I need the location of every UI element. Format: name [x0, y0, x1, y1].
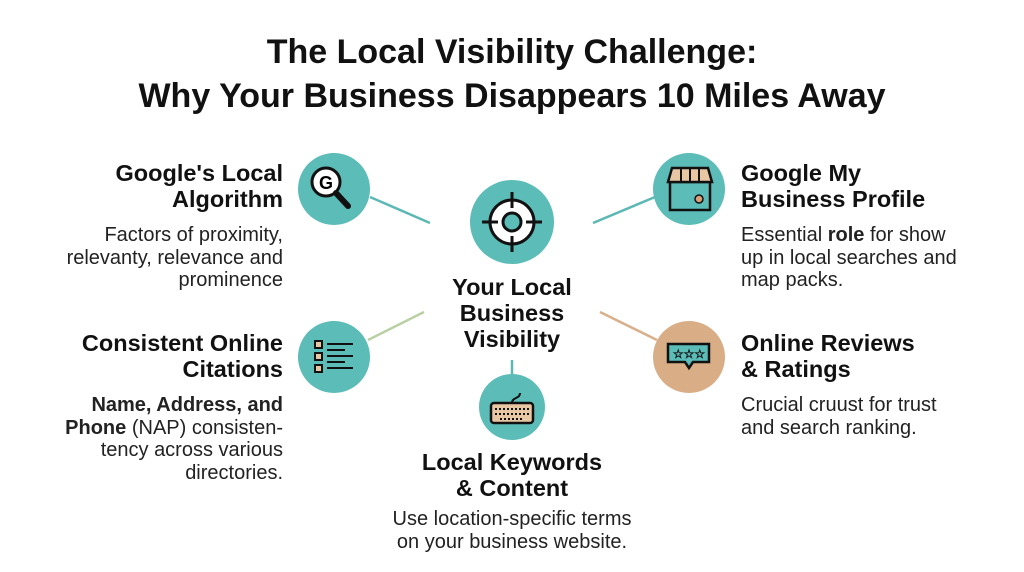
panel: google algorithm: Google's Local — [115, 160, 283, 186]
panel: citations: Citations — [182, 356, 283, 382]
icon: review bubble — [653, 321, 725, 393]
panel: GMB: Google My — [741, 160, 861, 186]
center label — [452, 274, 572, 352]
panel: reviews: Crucial cruust for trust — [741, 394, 937, 416]
icon: storefront — [653, 153, 725, 225]
panel: citations: directories. — [185, 462, 283, 484]
connectors — [368, 197, 657, 375]
panel: keywords: & Content — [456, 475, 568, 501]
panel: keywords — [393, 449, 631, 552]
icon: list — [298, 321, 370, 393]
panel: reviews — [741, 330, 937, 438]
title: Why Your Business Disappears 10 Miles Away — [138, 77, 886, 115]
icon: review bubble: ☆☆☆ — [673, 347, 705, 361]
panel: GMB: Business Profile — [741, 186, 925, 212]
icon: keyboard — [479, 374, 545, 440]
panel: GMB: up in local searches and — [741, 246, 957, 268]
icon: target center — [470, 180, 554, 264]
panel: google algorithm — [67, 160, 283, 291]
panel: reviews: & Ratings — [741, 356, 851, 382]
panel: citations: Name, Address, and — [91, 394, 283, 416]
panel: google algorithm: Algorithm — [172, 186, 283, 212]
panel: citations — [65, 330, 283, 484]
panel: GMB: Essential role for show — [741, 224, 946, 246]
panel: reviews: and search ranking. — [741, 416, 917, 438]
title — [138, 33, 886, 115]
title: The Local Visibility Challenge: — [267, 33, 757, 71]
panel: reviews: Online Reviews — [741, 330, 915, 356]
panel: GMB — [741, 160, 957, 291]
panel: keywords: Local Keywords — [422, 449, 602, 475]
icon: google search — [298, 153, 370, 225]
center label: Visibility — [464, 326, 560, 352]
panel: google algorithm: Factors of proximity, — [104, 224, 283, 246]
panel: citations: tency across various — [101, 439, 283, 461]
icon: google search: G — [319, 173, 333, 193]
panel: google algorithm: prominence — [178, 269, 283, 291]
center label: Business — [460, 300, 564, 326]
panel: citations: Phone (NAP) consisten- — [65, 416, 283, 438]
panel: GMB: map packs. — [741, 269, 843, 291]
panel: citations: Consistent Online — [82, 330, 283, 356]
panel: google algorithm: relevanty, relevance and — [67, 246, 283, 268]
panel: keywords: Use location-specific terms — [393, 508, 631, 530]
center label: Your Local — [452, 274, 572, 300]
panel: keywords: on your business website. — [397, 530, 627, 552]
